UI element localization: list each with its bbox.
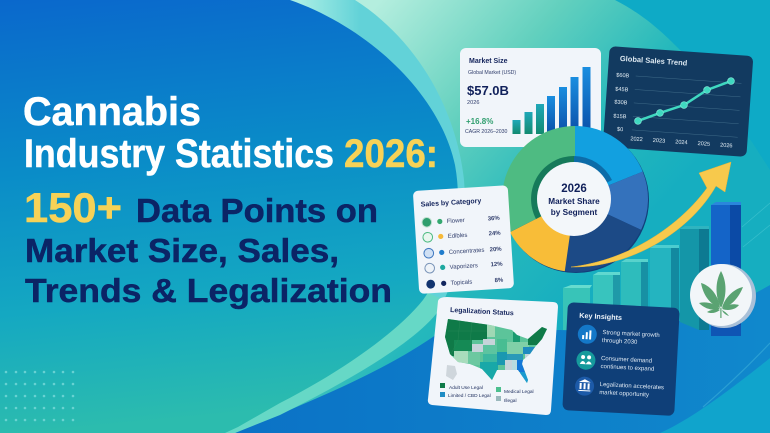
- panel: sales by category: Sales by Category: [421, 198, 482, 209]
- panel: legalization status: [428, 297, 558, 415]
- left blue panel: [0, 0, 458, 433]
- light swoosh lower: [215, 290, 445, 433]
- line chart: $45B: [615, 87, 629, 94]
- bar chart: market size: [512, 67, 590, 134]
- insight: consumers: [576, 350, 655, 373]
- map legend: Limited / CBD Legal: [448, 393, 491, 399]
- panel: legalization status: Legalization Status: [450, 307, 514, 317]
- map legend: [440, 383, 534, 404]
- line chart: 2024: [675, 139, 688, 146]
- legend rows: Vaporizers: [450, 263, 478, 271]
- light band upper: [290, 0, 465, 308]
- panel: global sales trend: [603, 46, 753, 157]
- line chart: $60B: [616, 73, 630, 80]
- map legend: Illegal: [504, 398, 517, 404]
- title: 2026:: [344, 132, 438, 176]
- panel: global sales trend: Global Sales Trend: [620, 54, 688, 68]
- map: alaska: [446, 365, 457, 380]
- map legend: Adult Use Legal: [449, 385, 483, 391]
- legend rows: 12%: [490, 262, 503, 268]
- panel: market size: [460, 48, 601, 147]
- donut chart: market share by segment: 2026: [561, 183, 587, 195]
- legend rows: Edibles: [448, 233, 468, 240]
- legend rows: Topicals: [451, 280, 473, 287]
- insight: consumers: continues to expand: [600, 364, 654, 373]
- legend rows: Concentrates: [449, 248, 485, 256]
- map legend: Medical Legal: [504, 389, 534, 395]
- panel: market size: $57.0B: [467, 83, 509, 98]
- panel: key insights: [562, 302, 680, 416]
- title: Data Points on: [136, 192, 378, 229]
- title: [23, 90, 438, 309]
- arrow: growth: [571, 162, 731, 267]
- insight: growth: through 2030: [602, 338, 638, 346]
- insight: growth: [577, 324, 660, 348]
- blue band: [235, 285, 770, 433]
- line chart: $0: [617, 127, 623, 133]
- insight: legalization: [575, 376, 664, 400]
- lower right swoosh: [660, 358, 770, 433]
- donut chart: market share by segment: by Segment: [551, 208, 597, 217]
- line chart: $15B: [613, 114, 627, 120]
- title: Cannabis: [23, 90, 201, 134]
- panel: market size: Global Market (USD): [468, 70, 516, 76]
- panel: market size: +16.8%: [466, 117, 493, 126]
- legend rows: 36%: [488, 216, 501, 222]
- icon: cannabis leaf badge: [690, 264, 756, 328]
- legend rows: Flower: [447, 218, 465, 225]
- insight: growth: Strong market growth: [602, 330, 660, 339]
- line chart: [612, 70, 742, 150]
- panel: market size: CAGR 2026–2030: [465, 129, 508, 135]
- legend rows: 24%: [489, 231, 502, 237]
- line chart: 2023: [653, 138, 665, 145]
- legend rows: [422, 213, 505, 289]
- panel: sales by category: [413, 185, 514, 294]
- title: 150+: [24, 184, 122, 231]
- title: Market Size, Sales,: [25, 232, 339, 269]
- line chart: 2022: [630, 136, 643, 143]
- title: Industry Statistics: [24, 132, 334, 176]
- panel: key insights: Key Insights: [579, 311, 622, 322]
- donut chart: market share by segment: [502, 126, 649, 273]
- donut chart: market share by segment: Market Share: [548, 197, 600, 206]
- insight: legalization: Legalization accelerates: [600, 382, 664, 391]
- panel: market size: Market Size: [469, 58, 508, 65]
- dot grid: [5, 371, 74, 421]
- 3d bar chart: [563, 202, 741, 336]
- line chart: 2026: [720, 143, 733, 149]
- title: Trends & Legalization: [25, 272, 392, 309]
- legend rows: 8%: [494, 278, 504, 284]
- insight: legalization: market opportunity: [599, 390, 649, 399]
- map: united states: [445, 319, 547, 383]
- panel: market size: 2026: [467, 100, 479, 106]
- line chart: $30B: [614, 100, 628, 106]
- legend rows: 20%: [490, 247, 503, 253]
- insight: consumers: Consumer demand: [601, 356, 652, 365]
- line chart: 2025: [697, 141, 710, 148]
